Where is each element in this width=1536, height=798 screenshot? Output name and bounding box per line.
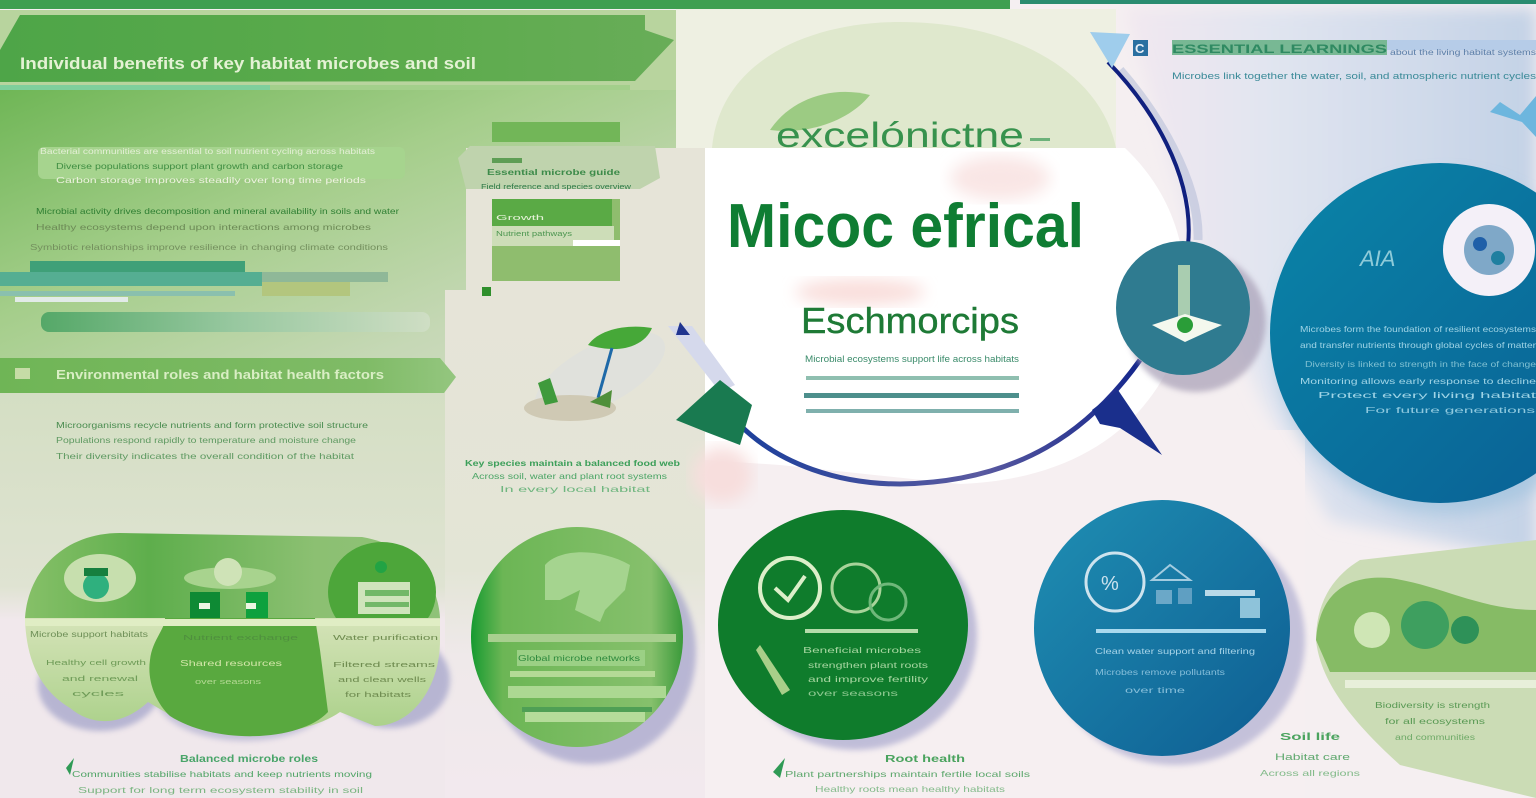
subtitle: Eschmorcips <box>801 300 1019 341</box>
large blue circle: Monitoring allows early response to decline <box>1300 376 1536 386</box>
caption: lower middle: Root health <box>885 754 965 765</box>
cluster of green bubbles: lower left: Microbe support habitats <box>30 630 148 639</box>
text block: upper left list: Carbon storage improves steadily over long time periods <box>56 176 366 185</box>
circle: green map <box>471 527 696 764</box>
blue arc arrow <box>668 32 1198 484</box>
cluster of green bubbles: lower left: and renewal <box>62 674 139 683</box>
caption: centre column: Across soil, water and plant root systems <box>472 471 667 481</box>
caption: lower right <box>1260 732 1360 778</box>
sidebar card: small list: Essential microbe guide <box>487 167 620 177</box>
circle: blue data <box>1034 500 1305 765</box>
main title: Micoc efrical <box>727 192 1084 261</box>
cluster of green bubbles: lower left: for habitats <box>345 690 411 699</box>
sidebar card: small list <box>458 122 660 296</box>
top right heading: ESSENTIAL LEARNINGS <box>1172 42 1387 56</box>
heading band: top left <box>0 15 674 90</box>
large blue circle <box>1270 163 1536 515</box>
sidebar card: small list: Nutrient pathways <box>496 231 573 238</box>
text block: upper left list: Diverse populations support plant growth and carbon storage <box>56 162 344 171</box>
caption: lower left: Balanced microbe roles <box>180 754 319 765</box>
circle: dark green: Beneficial microbes <box>803 645 921 655</box>
top right heading: about the living habitat systems <box>1390 48 1536 57</box>
circle: green map: Global microbe networks <box>518 653 640 663</box>
cluster of green bubbles: lower left: Nutrient exchange <box>183 633 298 642</box>
icon: clipboard <box>358 561 410 614</box>
caption: lower left: Communities stabilise habitats and keep nutrients moving <box>72 769 372 779</box>
panel: lower right green: for all ecosystems <box>1385 717 1485 726</box>
text block: upper left list: Symbiotic relationships improve resilience in changing climate conditions <box>30 242 388 252</box>
cluster of green bubbles: lower left <box>25 533 450 741</box>
sidebar card: small list: Field reference and species overview <box>481 184 632 191</box>
cluster of green bubbles: lower left: cycles <box>72 689 125 698</box>
green dome with title word <box>712 22 1116 155</box>
white central panel <box>692 148 1185 503</box>
large blue circle: and transfer nutrients through global cycles of matter <box>1300 340 1536 350</box>
circle: dark green: strengthen plant roots <box>808 660 928 670</box>
cluster of green bubbles: lower left: and clean wells <box>338 675 426 684</box>
large blue circle: Diversity is linked to strength in the face of change <box>1305 359 1536 369</box>
panel: lower right green: and communities <box>1395 733 1475 742</box>
circle: blue data: Clean water support and filtering <box>1095 646 1255 656</box>
circle: blue data: % <box>1101 573 1119 595</box>
text block: upper left list: Healthy ecosystems depend upon interactions among microbes <box>36 222 371 232</box>
centre text lines <box>804 354 1020 413</box>
caption: lower right: Habitat care <box>1275 752 1350 762</box>
top right heading: Microbes link together the water, soil, and atmospheric nutrient cycles <box>1172 71 1536 82</box>
caption: lower left: Support for long term ecosystem stability in soil <box>78 785 363 795</box>
caption: lower middle <box>773 754 1030 794</box>
circle: dark green: over seasons <box>808 688 898 698</box>
text block: upper left list: Microbial activity drives decomposition and mineral availability in soils and water <box>36 206 399 216</box>
circle: dark green <box>718 510 977 750</box>
green dome with title word: excelónictne <box>776 116 1024 155</box>
text block: mid left <box>56 420 368 461</box>
caption: centre column: In every local habitat <box>500 484 651 494</box>
large blue circle: For future generations <box>1365 405 1535 415</box>
caption: lower right: Soil life <box>1280 732 1341 743</box>
large blue circle: Microbes form the foundation of resilient ecosystems <box>1300 324 1536 334</box>
top right heading: C <box>1135 41 1145 56</box>
large blue circle: AIA <box>1358 246 1395 271</box>
caption: lower middle: Healthy roots mean healthy habitats <box>815 784 1005 794</box>
cluster of green bubbles: lower left: Healthy cell growth <box>46 658 146 667</box>
icon: microbe left <box>64 554 136 602</box>
node: microscope circle <box>1116 241 1266 392</box>
sidebar card: small list: Growth <box>496 215 544 222</box>
panel: lower right green <box>1316 540 1536 798</box>
text block: upper left list <box>30 147 405 252</box>
cluster of green bubbles: lower left: over seasons <box>195 677 261 686</box>
circle: dark green: and improve fertility <box>808 674 929 684</box>
text block: upper left list: Bacterial communities are essential to soil nutrient cycling across habitats <box>40 147 375 156</box>
caption: centre column: Key species maintain a balanced food web <box>465 458 680 468</box>
text block: mid left: Their diversity indicates the overall condition of the habitat <box>56 451 355 461</box>
heading band: mid left <box>0 358 456 393</box>
icon: plant sprout and roots <box>522 315 678 435</box>
circle: blue data: Microbes remove pollutants <box>1095 667 1225 677</box>
heading band: mid left: Environmental roles and habitat health factors <box>56 368 384 382</box>
cluster of green bubbles: lower left: Water purification <box>333 633 438 642</box>
top edge bars <box>0 0 1536 9</box>
text block: mid left: Microorganisms recycle nutrients and form protective soil structure <box>56 420 368 430</box>
text block: mid left: Populations respond rapidly to temperature and moisture change <box>56 435 356 445</box>
icon: seedlings <box>184 558 276 618</box>
circle: blue data: over time <box>1125 685 1185 695</box>
large blue circle: Protect every living habitat <box>1318 390 1536 400</box>
heading band: top left: Individual benefits of key habitat microbes and soil <box>20 54 476 73</box>
caption: lower left <box>66 754 372 795</box>
stripe bars: left panel <box>0 261 430 332</box>
caption: centre column <box>465 458 680 494</box>
centre text lines: Microbial ecosystems support life across habitats <box>805 354 1020 364</box>
top right heading <box>1133 40 1536 137</box>
cluster of green bubbles: lower left: Filtered streams <box>333 660 435 669</box>
caption: lower right: Across all regions <box>1260 768 1360 778</box>
cluster of green bubbles: lower left: Shared resources <box>180 659 282 668</box>
caption: lower middle: Plant partnerships maintain fertile local soils <box>785 769 1030 779</box>
panel: lower right green: Biodiversity is strength <box>1375 701 1490 710</box>
